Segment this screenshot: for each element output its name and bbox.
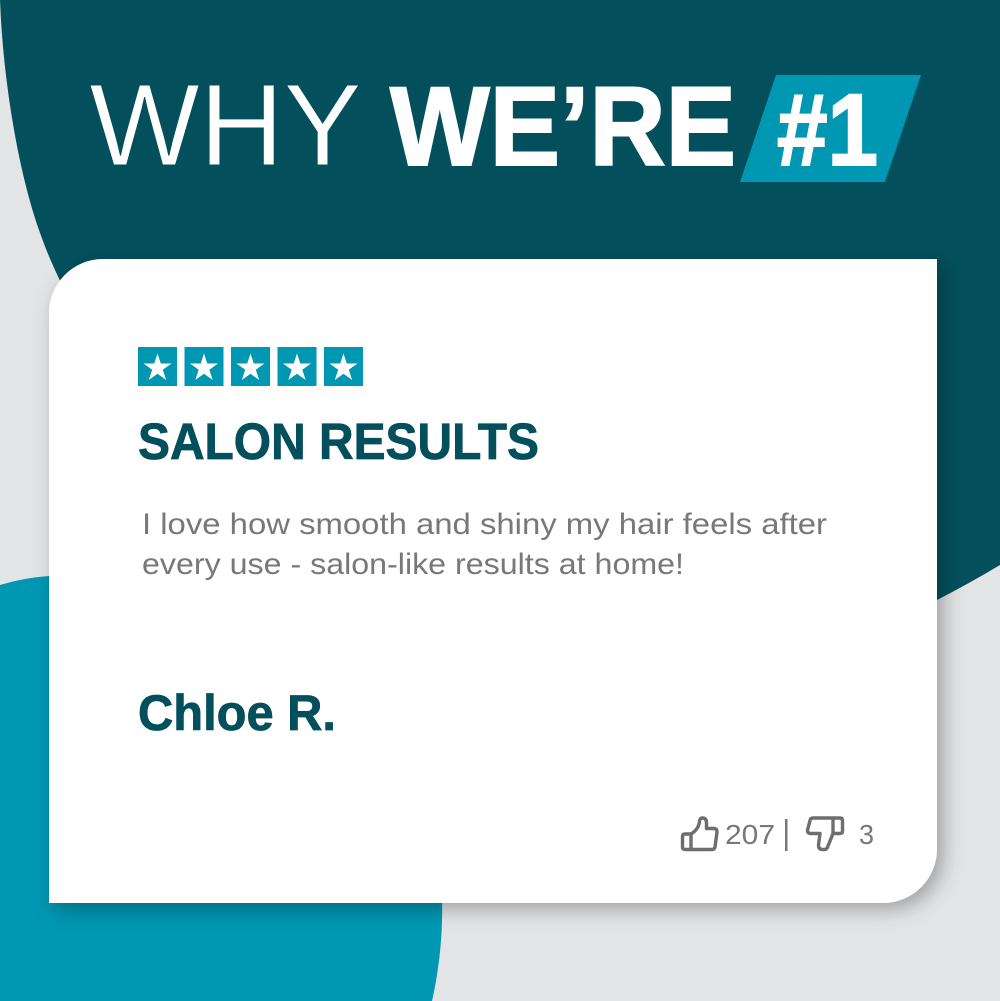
star rating: [138, 347, 363, 386]
feedback counts: [682, 818, 874, 851]
card background: [49, 259, 937, 903]
review heading: SALON RESULTS: [138, 413, 539, 470]
likes count: 207: [725, 819, 775, 850]
title: [90, 60, 736, 190]
divider: [785, 819, 788, 851]
review body text: [142, 508, 827, 581]
icon: thumbs down: [808, 818, 842, 850]
dark teal background blob: [0, 0, 1000, 600]
bright teal background blob: [0, 576, 442, 1001]
reviewer name: Chloe R.: [138, 685, 336, 741]
title: WHY: WHY: [90, 60, 362, 190]
badge: #1: [740, 73, 921, 187]
dislikes count: 3: [859, 819, 874, 850]
title: WE'RE: WE’RE: [390, 64, 736, 189]
icon: thumbs up: [682, 818, 717, 850]
review card: [49, 259, 937, 903]
badge: #1: #1: [777, 73, 878, 187]
review body text: I love how smooth and shiny my hair feels after: [142, 508, 827, 541]
review body text: every use - salon-like results at home!: [142, 548, 684, 581]
